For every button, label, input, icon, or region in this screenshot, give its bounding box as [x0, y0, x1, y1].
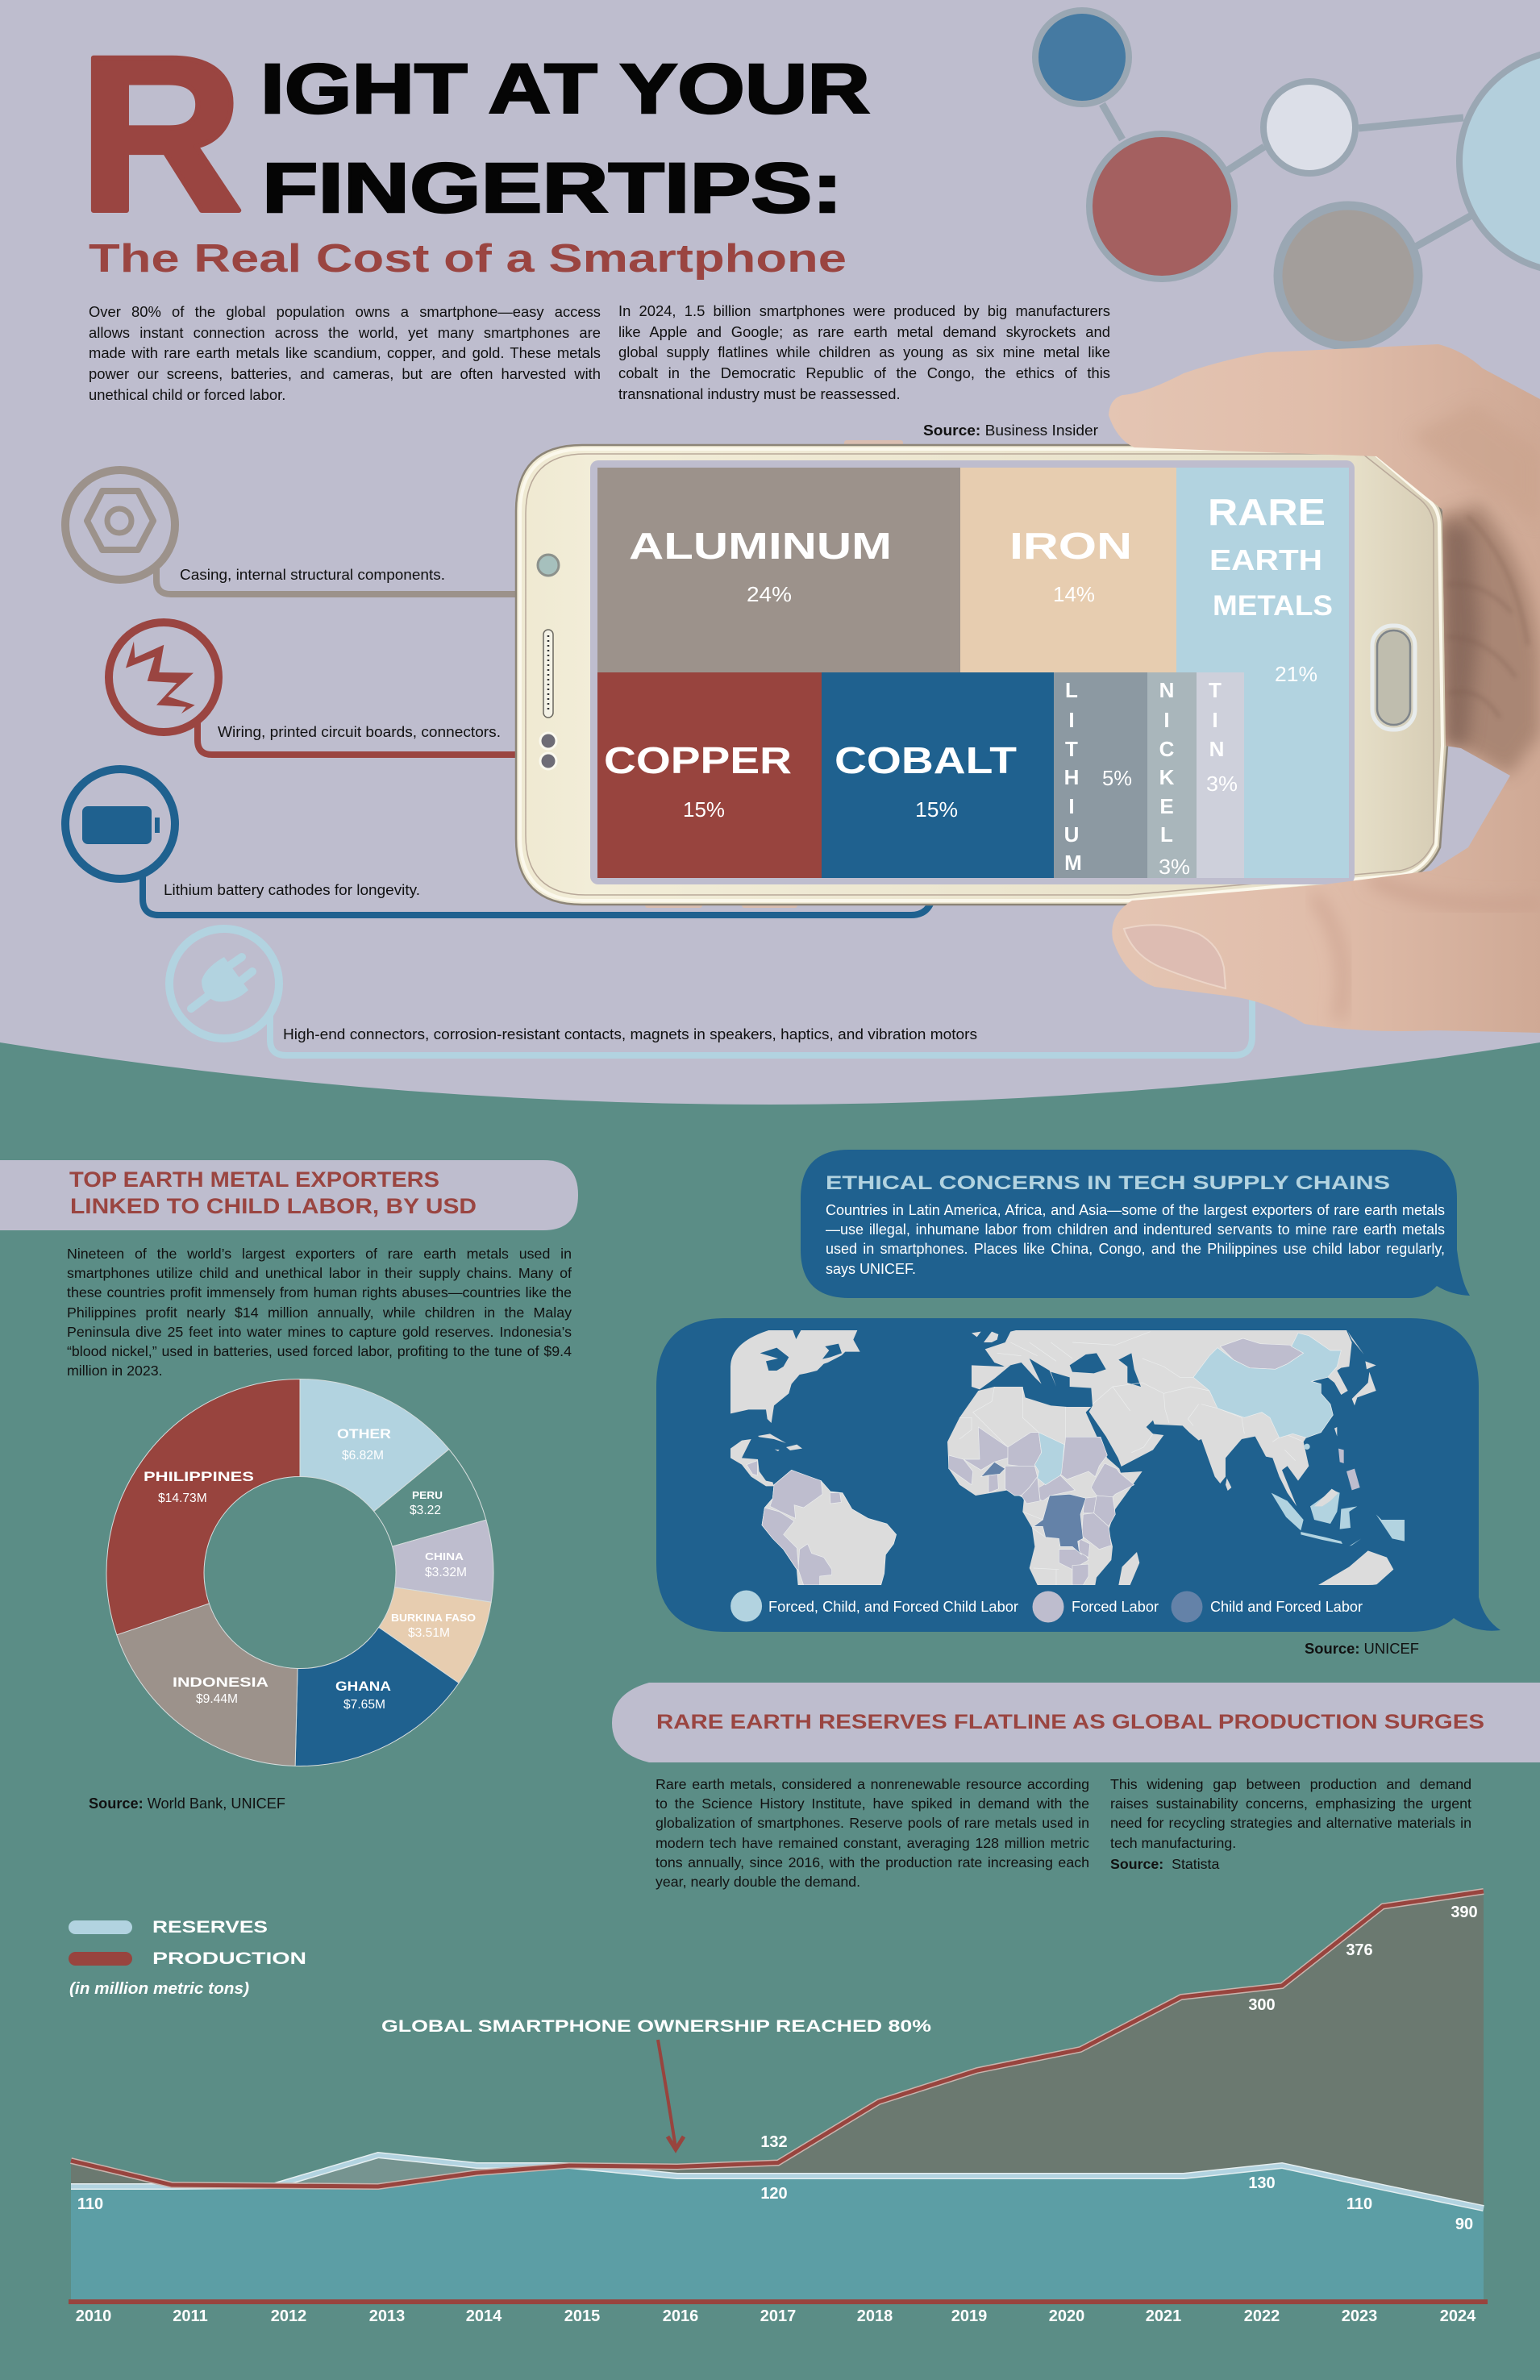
data labels: 90: [1455, 2216, 1473, 2233]
intro text left: unethical child or forced labor.: [89, 386, 285, 403]
panel: exporters heading pill: LINKED TO CHILD LABOR, BY USD: [70, 1194, 477, 1218]
title: [78, 10, 870, 258]
reserves text right: This widening gap between production and demand: [1110, 1776, 1471, 1792]
x axis years: 2010: [76, 2307, 111, 2325]
data labels: 110: [77, 2195, 103, 2213]
south america: [762, 1470, 897, 1585]
icon: hex nut with casing label: [65, 470, 522, 594]
donut labels: $7.65M: [343, 1698, 385, 1712]
x axis years: 2015: [564, 2307, 600, 2325]
world map: [730, 1330, 1405, 1585]
reserves text right: raises sustainability concerns, emphasizing the urgent: [1110, 1795, 1471, 1812]
reserves text left: globalization of smartphones. Reserve pools of rare metals used in: [656, 1815, 1089, 1831]
intro text left: Over 80% of the global population owns a smartphone—easy access: [89, 303, 601, 320]
chart legend: (in million metric tons): [69, 1980, 249, 1998]
annotation: global smartphone ownership: GLOBAL SMARTPHONE OWNERSHIP REACHED 80%: [381, 2017, 931, 2036]
block: nickel: N: [1159, 678, 1174, 702]
reserves text right: Source: Statista: [1110, 1856, 1219, 1872]
exporters text: Philippines profit nearly $14 million annually, while children in the Malay: [67, 1304, 572, 1321]
x axis baseline: [69, 2299, 1488, 2304]
donut labels: $14.73M: [158, 1492, 207, 1505]
spain, britain, ireland: [972, 1332, 1010, 1389]
molecule decoration: [1035, 10, 1540, 346]
x axis years: 2021: [1146, 2307, 1181, 2325]
donut labels: PHILIPPINES: [144, 1469, 254, 1484]
block: tin: T: [1209, 678, 1222, 702]
phone: [516, 440, 1447, 908]
panel: reserves heading pill: [612, 1683, 1540, 1762]
china: [1193, 1333, 1341, 1438]
eurasia: [985, 1330, 1352, 1506]
x axis years: 2016: [663, 2307, 698, 2325]
block: lithium: M: [1064, 851, 1082, 875]
eurasia borders: [997, 1332, 1304, 1461]
x axis years: 2018: [857, 2307, 893, 2325]
chart legend: RESERVES: [152, 1918, 268, 1937]
data labels: 120: [760, 2185, 788, 2203]
donut labels: $6.82M: [342, 1449, 384, 1463]
donut labels: $3.22: [410, 1504, 441, 1517]
icon: hex nut with casing label: Casing, internal structural components.: [180, 566, 445, 583]
icon: plug with connectors label: [169, 929, 1252, 1055]
donut labels: $3.32M: [425, 1566, 467, 1579]
x axis years: 2011: [173, 2307, 208, 2325]
block: tin: N: [1209, 737, 1224, 761]
map legend: Forced Labor: [1072, 1599, 1159, 1615]
block: copper: COPPER: [604, 739, 792, 781]
data labels: 110: [1346, 2195, 1372, 2213]
subtitle: The Real Cost of a Smartphone: [89, 237, 847, 281]
icon: lightning with wiring label: Wiring, printed circuit boards, connectors.: [218, 723, 501, 740]
exporters text: smartphones utilize child and unethical labor in their supply chains. Many of: [67, 1265, 572, 1281]
block: lithium: T: [1065, 737, 1078, 761]
map legend: [730, 1590, 1363, 1622]
reserves text left: to the Science History Institute, have spiked in demand with the: [656, 1795, 1089, 1812]
title: R: [78, 10, 243, 258]
production line: [71, 1891, 1484, 2187]
reserves text left: tons annually, since 2016, with the production rate increasing each: [656, 1854, 1089, 1870]
donut labels: INDONESIA: [173, 1675, 268, 1690]
block: lithium: I: [1068, 708, 1075, 732]
philippines: [1338, 1449, 1360, 1490]
block: cobalt: 15%: [915, 797, 958, 822]
intro text right: transnational industry must be reassessed.: [618, 385, 901, 402]
panel: ethical concerns speech bubble: ETHICAL CONCERNS IN TECH SUPPLY CHAINS: [826, 1172, 1390, 1194]
x axis years: 2019: [951, 2307, 987, 2325]
chart legend: PRODUCTION: [152, 1949, 306, 1968]
block: rare earth metals: 21%: [1275, 662, 1317, 686]
exporters text: Peninsula dive 25 feet into water mines to capture gold reserves. Indonesia’s: [67, 1324, 572, 1340]
reserves text left: [656, 1775, 1089, 1895]
map legend: Forced, Child, and Forced Child Labor: [768, 1599, 1018, 1615]
donut labels: CHINA: [425, 1550, 464, 1562]
block: rare earth metals: RARE: [1208, 491, 1326, 533]
background: teal lower section: [0, 1042, 1540, 2380]
panel: ethical concerns speech bubble: [801, 1150, 1470, 1298]
panel: map speech bubble: [656, 1318, 1500, 1632]
x axis years: 2022: [1244, 2307, 1280, 2325]
exporters text: million in 2023.: [67, 1363, 163, 1379]
panel: ethical concerns speech bubble: used in smartphones. Places like China, Congo, and the Philippines use child labor regularly,: [826, 1241, 1445, 1257]
block: rare earth metals: [1176, 468, 1349, 878]
donut labels: $9.44M: [196, 1692, 238, 1706]
source: business insider: Source: Business Insider: [923, 422, 1098, 439]
x axis years: 2024: [1440, 2307, 1476, 2325]
screen frame: [590, 460, 1355, 884]
africa: [947, 1387, 1143, 1585]
panel: exporters heading pill: [0, 1160, 578, 1230]
reserves text left: modern tech have remained constant, averaging 128 million metric: [656, 1835, 1089, 1851]
donut labels: PERU: [412, 1489, 443, 1501]
donut labels: BURKINA FASO: [391, 1612, 476, 1624]
intro text right: In 2024, 1.5 billion smartphones were produced by big manufacturers: [618, 302, 1110, 319]
title: IGHT AT YOUR: [260, 50, 870, 128]
block: lithium: U: [1064, 822, 1079, 847]
source: world bank: Source: World Bank, UNICEF: [89, 1795, 285, 1812]
block: aluminum: ALUMINUM: [629, 525, 892, 567]
data labels: 300: [1248, 1996, 1276, 2014]
icon: plug with connectors label: High-end connectors, corrosion-resistant contacts, magnets in speakers, haptics, and vibration motors: [283, 1026, 977, 1042]
block: lithium: 5%: [1102, 766, 1132, 790]
block: copper: 15%: [683, 797, 725, 822]
area chart: [69, 1891, 1488, 2325]
panel: ethical concerns speech bubble: says UNICEF.: [826, 1261, 916, 1277]
indonesia: [1272, 1490, 1405, 1546]
block: nickel: C: [1159, 737, 1175, 761]
intro text left: [89, 302, 601, 410]
data labels: [77, 1904, 1478, 2233]
block: nickel: K: [1159, 765, 1175, 789]
africa borders: [959, 1387, 1066, 1585]
block: nickel: I: [1163, 708, 1170, 732]
title: FINGERTIPS:: [262, 149, 843, 227]
x axis years: 2012: [271, 2307, 306, 2325]
australia: [1318, 1550, 1393, 1585]
donut labels: GHANA: [335, 1679, 391, 1694]
x axis years: [76, 2307, 1476, 2325]
donut labels: OTHER: [337, 1426, 391, 1442]
block: lithium: I: [1068, 794, 1075, 818]
panel: ethical concerns speech bubble: Countries in Latin America, Africa, and Asia—some of the largest exporters of rare earth metals: [826, 1202, 1445, 1218]
reserves text right: need for recycling strategies and alternative materials in: [1110, 1815, 1471, 1831]
x axis years: 2020: [1049, 2307, 1084, 2325]
mongolia: [1220, 1338, 1304, 1369]
reserves text left: Rare earth metals, considered a nonrenewable resource according: [656, 1776, 1089, 1792]
block: aluminum: 24%: [747, 582, 792, 606]
hand holding phone: [1109, 344, 1540, 1033]
intro text right: like Apple and Google; as rare earth metal demand skyrockets and: [618, 323, 1110, 340]
reserves line: [71, 2155, 1484, 2208]
block: rare earth metals: METALS: [1213, 590, 1333, 622]
phone body: [516, 440, 1447, 908]
data labels: 390: [1451, 1904, 1478, 1921]
donut labels: $3.51M: [408, 1626, 450, 1640]
block: lithium: [1054, 672, 1147, 878]
intro text left: made with rare earth metals like scandium, copper, and gold. These metals: [89, 344, 601, 361]
x axis years: 2013: [369, 2307, 405, 2325]
icon: lightning with wiring label: [109, 622, 522, 755]
reserves text left: year, nearly double the demand.: [656, 1874, 860, 1890]
block: iron: IRON: [1009, 525, 1132, 567]
panel: ethical concerns speech bubble: —use illegal, inhumane labor from children and indentured servants to mine rare earth metals: [826, 1221, 1445, 1238]
intro text right: global supply flatlines while children as young as six mine metal like: [618, 343, 1110, 360]
block: nickel: L: [1160, 822, 1173, 847]
exporters text: “blood nickel,” used in batteries, used forced labor, profiting to the tune of $9.4: [67, 1343, 572, 1359]
intro text right: [618, 301, 1110, 410]
panel: exporters heading pill: TOP EARTH METAL EXPORTERS: [69, 1167, 439, 1192]
block: tin: I: [1212, 708, 1218, 732]
block: nickel: 3%: [1159, 855, 1190, 879]
data labels: 376: [1346, 1941, 1373, 1959]
data labels: 132: [760, 2133, 788, 2151]
islands: japan, taiwan, sri lanka, madagascar: [1118, 1332, 1376, 1585]
x axis years: 2023: [1342, 2307, 1377, 2325]
block: aluminum: [597, 468, 960, 672]
exporters text: [67, 1244, 572, 1385]
x axis years: 2014: [466, 2307, 502, 2325]
block: copper: [597, 672, 822, 878]
intro text left: power our screens, batteries, and cameras, but are often harvested with: [89, 365, 601, 382]
block: nickel: E: [1159, 794, 1174, 818]
chart legend: [69, 1918, 306, 1998]
block: rare earth metals: EARTH: [1209, 543, 1322, 576]
arrow: annotation pointer: [658, 2040, 684, 2149]
exporters text: Nineteen of the world’s largest exporters of rare earth metals used in: [67, 1246, 572, 1262]
block: tin: 3%: [1206, 772, 1238, 796]
block: iron: [960, 468, 1176, 672]
donut chart: [106, 1379, 493, 1766]
block: lithium: L: [1065, 678, 1078, 702]
block: lithium: H: [1064, 765, 1079, 789]
intro text right: cobalt in the Democratic Republic of the Congo, the ethics of this: [618, 364, 1110, 381]
reserves text right: tech manufacturing.: [1110, 1835, 1236, 1851]
icon: battery with lithium label: Lithium battery cathodes for longevity.: [164, 881, 420, 898]
panel: reserves heading pill: RARE EARTH RESERVES FLATLINE AS GLOBAL PRODUCTION SURGES: [656, 1711, 1484, 1733]
block: iron: 14%: [1053, 582, 1095, 606]
north america: [730, 1330, 860, 1423]
data labels: 130: [1248, 2174, 1276, 2192]
intro text left: allows instant connection across the world, yet many smartphones are: [89, 324, 601, 341]
source: unicef: Source: UNICEF: [1305, 1641, 1419, 1657]
map legend: Child and Forced Labor: [1210, 1599, 1363, 1615]
block: tin: [1197, 672, 1244, 878]
exporters text: these countries profit immensely from human rights abuses—countries like the: [67, 1284, 572, 1300]
donut labels: [144, 1426, 476, 1712]
x axis years: 2017: [760, 2307, 796, 2325]
icon: battery with lithium label: [65, 769, 932, 915]
block: cobalt: [822, 672, 1054, 878]
block: nickel: [1147, 672, 1197, 879]
block: cobalt: COBALT: [835, 739, 1017, 781]
reserves text right: [1110, 1775, 1471, 1875]
